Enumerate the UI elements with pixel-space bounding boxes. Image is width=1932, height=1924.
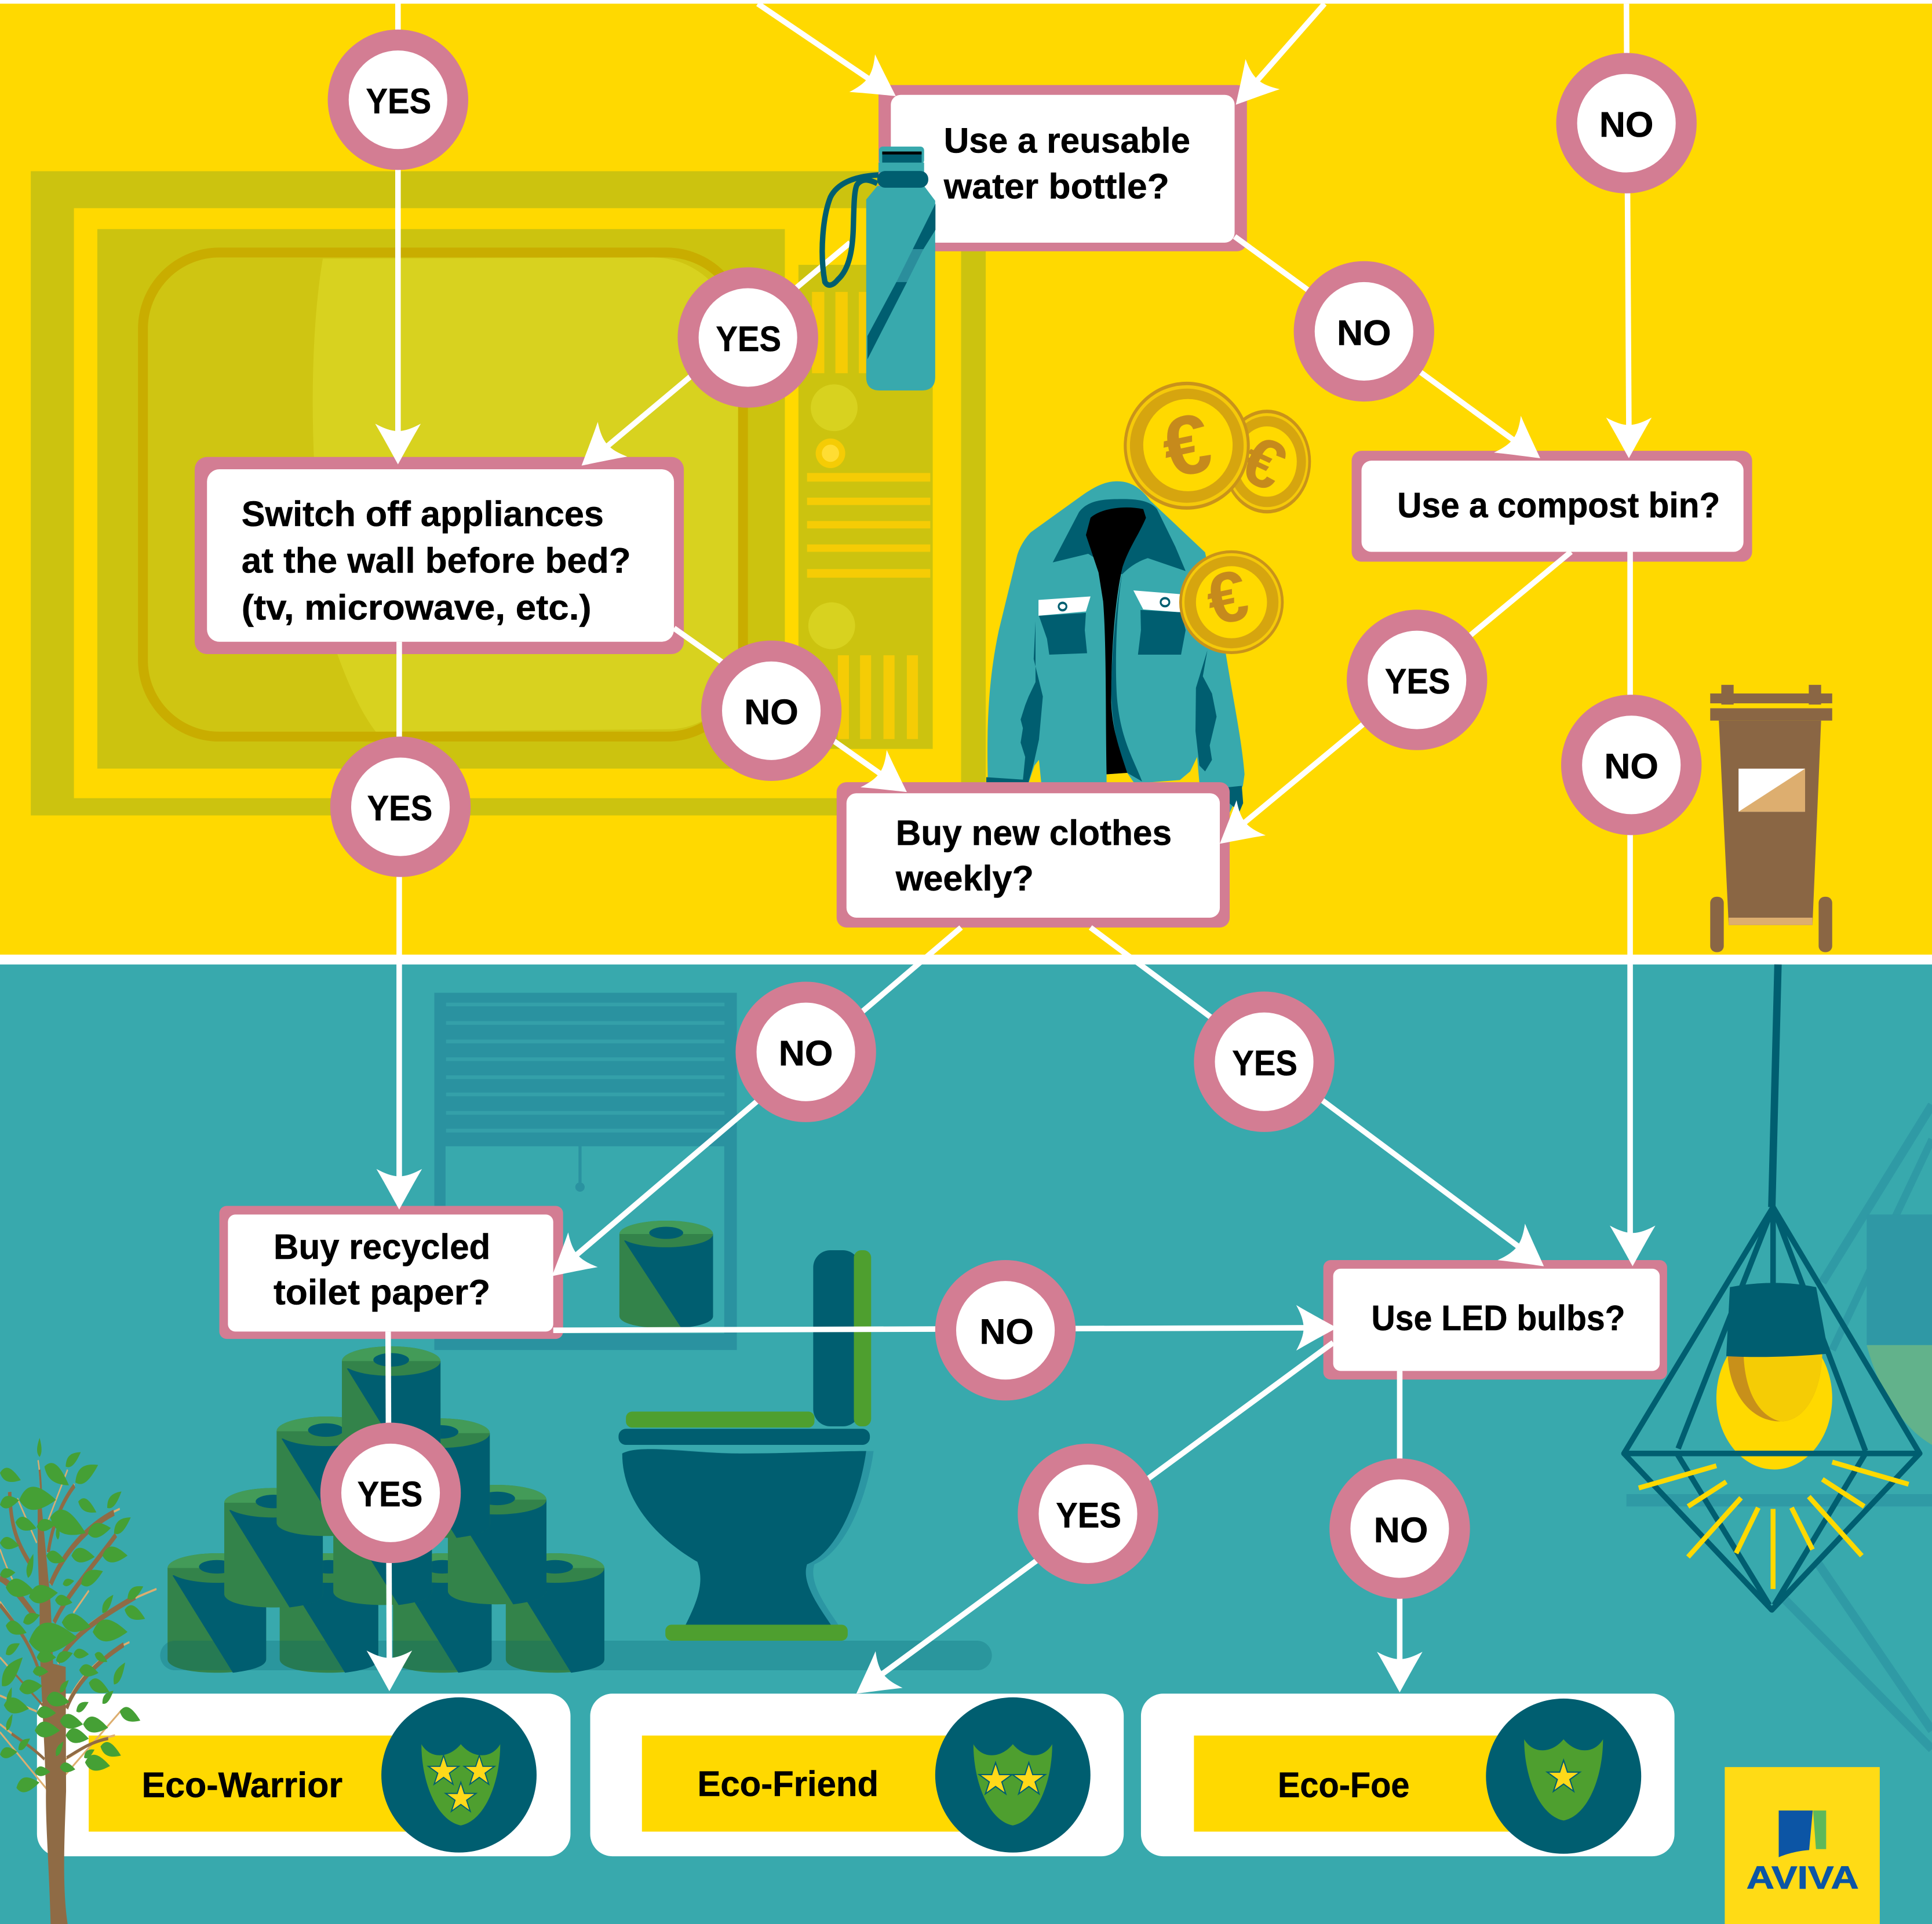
arrowhead: to clothes box top [861, 750, 920, 811]
panel: teal bathroom background [0, 965, 1932, 1924]
arrowhead: to LED box top right [1610, 1225, 1656, 1266]
illustration: background lamp shadow [1627, 1105, 1932, 1749]
question text: Buy recycled [274, 1227, 490, 1267]
decision: YES 6 [320, 1423, 461, 1563]
arrowhead: to switch off box right [567, 422, 628, 483]
arrowhead: to LED box left [1296, 1305, 1337, 1350]
arrowhead: to recycled box right [537, 1232, 598, 1294]
logo: AVIVA: AVIVA [1747, 1860, 1859, 1896]
illustration: wheelie bin [1710, 685, 1832, 952]
illustration: euro coins: € [1200, 554, 1255, 641]
decision: YES 3 [330, 736, 471, 877]
question text: Switch off appliances [242, 494, 604, 534]
arrowhead: to switch off box [375, 424, 421, 465]
decision: YES 7 [1018, 1444, 1158, 1584]
decision: NO 5: NO [779, 1034, 833, 1074]
flow arrows [367, 0, 1656, 1712]
label: Eco-Warrior: Eco-Warrior [142, 1765, 342, 1805]
decision: NO 7: NO [1374, 1510, 1428, 1550]
decision: NO 2 [1294, 261, 1434, 401]
illustration: pyramid of toilet rolls [167, 1346, 604, 1673]
decision: NO 3: NO [744, 692, 799, 732]
badge: three stars [381, 1697, 537, 1853]
decision: YES 7: YES [1056, 1495, 1121, 1535]
illustration: tree [0, 1438, 156, 1924]
decision: NO 5 [735, 982, 876, 1122]
illustration: bathroom window [435, 993, 737, 1350]
illustration: euro coins [1124, 382, 1311, 654]
decision: NO 3 [701, 641, 841, 781]
question text [895, 813, 1172, 899]
question text: at the wall before bed? [242, 541, 631, 581]
illustration: toilet roll on windowsill [619, 1221, 713, 1328]
label: Eco-Foe: Eco-Foe [1278, 1765, 1409, 1805]
illustration: floor shadow [160, 1641, 992, 1670]
decision: NO 2: NO [1337, 313, 1391, 353]
illustration: microwave [31, 171, 986, 815]
decision: YES 5: YES [1232, 1043, 1297, 1083]
decision: NO 6 [935, 1260, 1076, 1400]
panel: yellow kitchen background [0, 3, 1932, 955]
flow box: recycled toilet paper [219, 1206, 563, 1339]
illustration: euro coins: € [1154, 395, 1219, 496]
result card: Eco-Foe [1141, 1693, 1675, 1856]
question text: Use a compost bin? [1397, 485, 1720, 525]
question text [242, 494, 631, 627]
decision: YES 1 [328, 30, 468, 170]
badge: one star [1486, 1699, 1641, 1854]
decision: YES 1: YES [366, 82, 431, 122]
question text [943, 121, 1190, 206]
label: Eco-Friend: Eco-Friend [697, 1764, 878, 1804]
question text: toilet paper? [274, 1273, 490, 1313]
arrowhead: to clothes box right [1205, 800, 1266, 861]
question text: (tv, microwave, etc.) [242, 587, 592, 627]
decision: NO 7 [1329, 1458, 1470, 1599]
decision: YES 2: YES [716, 319, 781, 359]
arrowhead: to Eco-Warrior [367, 1651, 412, 1691]
decision: NO 1 [1556, 53, 1697, 194]
decision: YES 2 [677, 267, 818, 408]
decision: YES 6: YES [358, 1474, 422, 1514]
illustration: jacket [986, 481, 1245, 820]
badge: two stars [935, 1697, 1091, 1853]
question text: water bottle? [943, 166, 1169, 206]
decision: NO 1: NO [1599, 105, 1653, 145]
arrowhead: to compost box left [1494, 416, 1554, 477]
question text: weekly? [895, 859, 1034, 899]
illustration: toilet [618, 1250, 874, 1641]
decision: NO 6: NO [979, 1312, 1034, 1352]
result card: Eco-Warrior [37, 1693, 570, 1856]
question text: Use a reusable [944, 121, 1190, 161]
arrowhead: to recycled box [377, 1169, 422, 1210]
decision: YES 3: YES [367, 788, 432, 828]
decision: NO 4: NO [1604, 747, 1658, 787]
arrowhead: to Eco-Friend [843, 1651, 903, 1712]
flow box: reusable water bottle [878, 85, 1247, 251]
question text: Buy new clothes [896, 813, 1172, 853]
question text [274, 1227, 490, 1313]
question text: Use LED bulbs? [1372, 1298, 1625, 1338]
flow box: LED bulbs [1324, 1260, 1667, 1379]
flow box: buy new clothes [837, 782, 1230, 928]
flow box: switch off appliances [195, 457, 684, 654]
decision: YES 5 [1194, 992, 1335, 1132]
arrowhead: to LED box top [1497, 1224, 1558, 1284]
decision: NO 4 [1561, 695, 1701, 835]
result card: Eco-Friend [590, 1693, 1124, 1856]
illustration: euro coins: € [1230, 420, 1297, 506]
arrowhead: to compost box right [1606, 418, 1652, 458]
decision: YES 4 [1347, 609, 1487, 750]
flow box: compost bin [1352, 451, 1752, 562]
illustration: water bottle [822, 147, 935, 390]
arrowhead: to bottle box left [850, 54, 909, 115]
logo: AVIVA [1725, 1767, 1880, 1924]
decision: YES 4: YES [1385, 662, 1450, 702]
arrowhead: to bottle box right [1219, 59, 1280, 120]
arrowhead: to Eco-Foe [1377, 1652, 1423, 1692]
illustration: pendant lamp [1624, 965, 1920, 1610]
